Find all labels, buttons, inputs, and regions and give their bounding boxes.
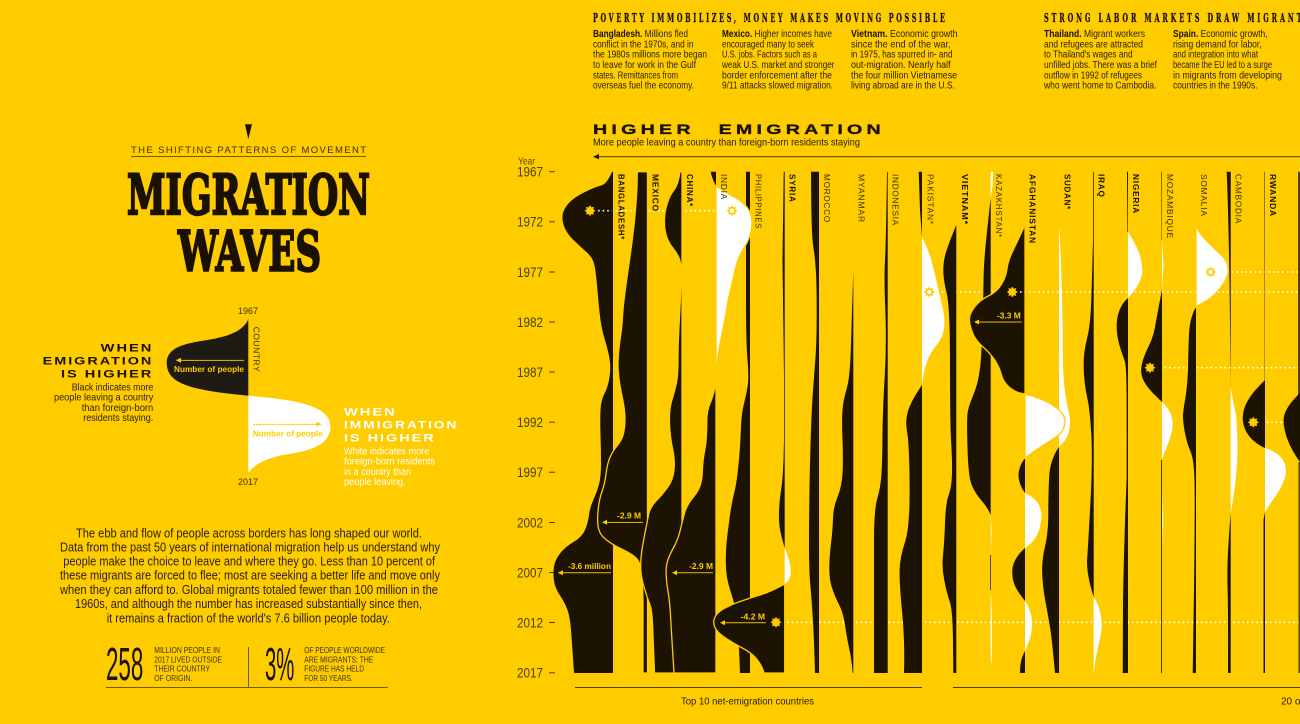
year axis: 2007 <box>517 564 543 580</box>
value callouts <box>558 311 1022 625</box>
text: Mexico: weak U.S. market and stronger <box>721 60 835 71</box>
series: Afghanistan <box>969 172 1025 673</box>
callout: India -2.9 M: -2.9 M <box>689 561 713 571</box>
legend text: emigration: people leaving a country <box>54 392 154 404</box>
black emigration streams <box>554 172 1300 673</box>
legend text: emigration: EMIGRATION <box>43 355 153 367</box>
event dotted lines <box>598 211 1300 622</box>
title: waves: WAVES <box>177 218 321 284</box>
country labels: SYRIA <box>788 174 798 203</box>
country labels: INDONESIA <box>891 174 901 226</box>
callout: Syria -4.2 M <box>720 612 766 625</box>
text: Mexico: Mexico. Higher incomes have <box>722 29 832 40</box>
country labels: SOMALIA <box>1199 174 1209 217</box>
heading: poverty: POVERTY IMMOBILIZES, MONEY MAKES MOVING POSSIBLE <box>593 12 945 26</box>
country labels: VIETNAM* <box>960 174 970 225</box>
year axis: 1987 <box>517 364 543 380</box>
text: Thailand: and refugees are attracted <box>1044 39 1143 50</box>
series: Somalia <box>1183 307 1196 673</box>
text: Thailand: to Thailand's wages and <box>1044 50 1133 61</box>
subheading: More people leaving a country than foreign-born residents staying <box>593 136 860 148</box>
year axis: 2002 <box>517 514 543 530</box>
legend: emigration axis text: Number of people <box>174 364 244 374</box>
legend text: immigration: WHEN <box>344 407 397 419</box>
callout: Syria -4.2 M: -4.2 M <box>741 612 765 622</box>
country labels: IRAQ <box>1097 174 1107 198</box>
legend text: immigration: White indicates more <box>344 445 429 457</box>
legend text: immigration <box>344 407 458 488</box>
title: migration: MIGRATION <box>127 162 370 227</box>
series: Rwanda <box>1243 172 1265 673</box>
series white: India <box>716 186 752 383</box>
stat: 258 million: 258 <box>106 638 143 690</box>
series white: Cambodia <box>1231 387 1238 513</box>
text: Vietnam <box>851 29 958 92</box>
intro paragraph: it remains a fraction of the world's 7.6 billion people today. <box>107 611 390 625</box>
event markers <box>584 205 1259 628</box>
country labels: MOROCCO <box>822 174 832 223</box>
callout: Afghanistan -3.3 M <box>974 311 1022 324</box>
text: Thailand <box>1043 29 1157 92</box>
stat: 258 million: MILLION PEOPLE IN <box>154 645 220 655</box>
legend text: emigration: IS HIGHER <box>61 368 153 380</box>
marker: Pakistan inflow <box>924 286 935 298</box>
top section: poverty immobilizes <box>593 12 958 92</box>
series: Morocco <box>809 172 819 673</box>
text: Spain: in migrants from developing <box>1173 70 1282 81</box>
text: Spain: countries in the 1990s. <box>1173 81 1258 92</box>
legend text: immigration: IS HIGHER <box>344 432 436 444</box>
series: Bangladesh <box>554 172 613 673</box>
marker: Bangladesh 1971 <box>584 205 612 216</box>
legend: emigration arrow <box>176 358 244 363</box>
text: Spain <box>1173 29 1282 92</box>
country labels: CAMBODIA <box>1234 174 1244 224</box>
stat: 3 percent <box>265 638 385 690</box>
text: Vietnam: living abroad are in the U.S. <box>851 81 955 92</box>
white immigration streams <box>716 172 1286 673</box>
text: Bangladesh: Bangladesh. Millions fled <box>593 29 688 40</box>
stat: 258 million <box>106 638 222 690</box>
year axis: 1982 <box>517 314 543 330</box>
series: India <box>666 172 716 673</box>
country labels: INDIA <box>719 174 729 200</box>
series: Syria <box>714 172 785 673</box>
text: Mexico <box>721 29 835 92</box>
text: Spain: Spain. Economic growth, <box>1173 29 1268 40</box>
year axis: 1967 <box>517 164 543 180</box>
marker: Syria outflow <box>770 617 782 628</box>
legend diagram <box>167 306 331 487</box>
series white: Pakistan <box>922 237 944 385</box>
legend text: emigration: residents staying. <box>83 412 153 424</box>
series: Iraq <box>1084 172 1094 597</box>
icon: wedge pointer <box>245 124 252 139</box>
text: Bangladesh: overseas fuel the economy. <box>593 81 694 92</box>
country labels: MEXICO <box>651 174 661 212</box>
marker: Mozambique outflow <box>1144 362 1156 373</box>
callout: Mexico -2.9 M: -2.9 M <box>617 511 641 521</box>
legend: immigration arrow <box>253 422 322 427</box>
series white: Kazakhstan <box>991 172 993 663</box>
marker: Rwanda outflow <box>1248 417 1259 428</box>
series white: Nigeria <box>1128 232 1142 298</box>
stat: 3 percent: OF PEOPLE WORLDWIDE <box>304 645 385 655</box>
legend: year 1967: 1967 <box>238 306 258 316</box>
text: Mexico: U.S. jobs. Factors such as a <box>722 50 817 61</box>
year axis <box>517 156 555 681</box>
stat: 3 percent: 3% <box>265 638 294 690</box>
legend text: immigration: foreign-born residents <box>344 455 435 467</box>
text: Mexico: encouraged many to seek <box>722 39 815 50</box>
text: Vietnam: Vietnam. Economic growth <box>851 29 958 40</box>
stat: 3 percent: ARE MIGRANTS; THE <box>304 654 374 664</box>
intro paragraph: people make the choice to leave and where they go. Less than 10 percent of <box>63 555 435 569</box>
text: Spain: and integration into what <box>1173 50 1258 61</box>
stat: 3 percent: FOR 50 YEARS. <box>304 673 353 683</box>
series: Nigeria <box>1117 172 1128 673</box>
year axis: 2012 <box>517 614 543 630</box>
legend text: immigration: in a country than <box>344 466 411 478</box>
country labels: SUDAN* <box>1063 174 1073 210</box>
country labels: BANGLADESH* <box>616 174 626 240</box>
text: Thailand: outflow in 1992 of refugees <box>1044 70 1142 81</box>
year axis: 1972 <box>517 214 543 230</box>
country labels: PAKISTAN* <box>926 174 936 225</box>
marker: India inflow <box>726 205 738 216</box>
intro paragraph: Data from the past 50 years of international migration help us understand why <box>60 541 441 555</box>
legend text: immigration: people leaving. <box>344 476 406 488</box>
series: China <box>641 172 682 673</box>
callout: Afghanistan -3.3 M: -3.3 M <box>997 311 1021 321</box>
callout: Bangladesh -3.6 million: -3.6 million <box>568 561 611 571</box>
year axis: 1977 <box>517 264 543 280</box>
series: Indonesia <box>874 172 888 673</box>
intro paragraph: these migrants are forced to flee; most are seeking a better life and move only <box>60 569 441 583</box>
series white: Sudan <box>1059 225 1070 447</box>
stat: 3 percent: FIGURE HAS HELD <box>304 664 364 674</box>
marker: Afghanistan outflow <box>1007 286 1025 298</box>
series: Mozambique <box>1141 172 1162 673</box>
country labels: PHILIPPINES <box>754 174 764 229</box>
country labels: MYANMAR <box>857 174 867 223</box>
legend text: immigration: IMMIGRATION <box>344 419 458 431</box>
legend text: emigration: Black indicates more <box>72 382 153 394</box>
bottom brackets <box>575 687 1300 708</box>
intro paragraph: The ebb and flow of people across borders has long shaped our world. <box>76 526 422 540</box>
series: next country, cropped <box>1284 172 1300 673</box>
arrow: direction of emigration <box>593 154 1300 159</box>
legend text: emigration: than foreign-born <box>82 402 153 414</box>
intro paragraph <box>59 526 441 625</box>
series white: Syria <box>785 548 791 584</box>
country labels: CHINA* <box>685 174 695 207</box>
top section: strong labor markets <box>1043 12 1300 92</box>
series: Pakistan <box>900 172 922 673</box>
callout: Mexico -2.9 M <box>602 511 643 525</box>
series: Mexico <box>598 172 648 673</box>
stat: 258 million: THEIR COUNTRY <box>154 664 210 674</box>
bracket: top 10 countries: Top 10 net-emigration countries <box>681 696 814 708</box>
text: Bangladesh: the 1980s millions more began <box>593 50 707 61</box>
legend: year 2017: 2017 <box>238 477 258 487</box>
text: Thailand: who went home to Cambodia. <box>1043 81 1156 92</box>
text: Bangladesh: to leave for work in the Gulf <box>593 60 696 71</box>
series: Kazakhstan <box>967 198 991 590</box>
chart header <box>593 121 1300 159</box>
text: Bangladesh <box>593 29 707 92</box>
legend: immigration axis text: Number of people <box>253 428 323 438</box>
series: Philippines <box>726 172 750 673</box>
title block <box>127 124 370 284</box>
country labels <box>616 174 1278 244</box>
legend text: emigration <box>43 343 154 424</box>
country labels: NIGERIA <box>1131 174 1141 214</box>
text: Thailand: Thailand. Migrant workers <box>1044 29 1145 40</box>
stats row <box>106 638 388 690</box>
series white: Afghanistan <box>1025 394 1065 651</box>
series white: Rwanda <box>1265 448 1286 512</box>
text: Vietnam: since the end of the war, <box>851 39 951 50</box>
country labels: AFGHANISTAN <box>1028 174 1038 244</box>
text: Mexico: border enforcement after the <box>722 70 832 81</box>
year axis: 1997 <box>517 464 543 480</box>
intro paragraph: when they can afford to. Global migrants totaled fewer than 100 million in the <box>59 583 438 597</box>
country labels: KAZAKHSTAN* <box>994 174 1004 238</box>
kicker: THE SHIFTING PATTERNS OF MOVEMENT <box>131 145 366 156</box>
legend: country axis label: COUNTRY <box>252 327 262 372</box>
text: Bangladesh: conflict in the 1970s, and in <box>593 39 694 50</box>
year axis: Year <box>518 156 536 168</box>
text: Spain: rising demand for labor, <box>1173 39 1262 50</box>
text: Vietnam: in 1975, has spurred in- and <box>851 50 952 61</box>
series white: Somalia <box>1196 225 1228 307</box>
text: Bangladesh: states. Remittances from <box>593 70 678 81</box>
marker: Somalia inflow <box>1205 266 1216 278</box>
legend: emigration shape <box>167 319 248 396</box>
callout: Bangladesh -3.6 million <box>558 561 611 575</box>
year axis: 2017 <box>517 665 543 681</box>
legend text: emigration: WHEN <box>101 343 153 355</box>
text: Mexico: 9/11 attacks slowed migration. <box>722 81 833 92</box>
country labels: MOZAMBIQUE <box>1165 174 1175 239</box>
stat: 258 million: OF ORIGIN. <box>154 673 192 683</box>
text: Thailand: unfilled jobs. There was a brief <box>1044 60 1157 71</box>
year axis: 1992 <box>517 414 543 430</box>
intro paragraph: 1960s, and although the number has increased substantially since then, <box>75 597 422 611</box>
series white: Mozambique <box>1162 240 1173 545</box>
stat: 258 million: 2017 LIVED OUTSIDE <box>154 654 222 664</box>
callout: India -2.9 M <box>672 561 713 575</box>
series: Myanmar <box>829 270 853 673</box>
series: Vietnam <box>943 225 956 673</box>
heading: higher emigration: HIGHER EMIGRATION <box>593 121 885 137</box>
series: Sudan <box>1042 447 1059 673</box>
country labels: RWANDA <box>1268 174 1278 217</box>
text: Vietnam: the four million Vietnamese <box>851 70 957 81</box>
series white: Iraq <box>1094 597 1102 673</box>
series: Cambodia <box>1227 172 1231 673</box>
legend: immigration shape <box>248 396 331 473</box>
text: Vietnam: out-migration. Nearly half <box>851 60 951 71</box>
